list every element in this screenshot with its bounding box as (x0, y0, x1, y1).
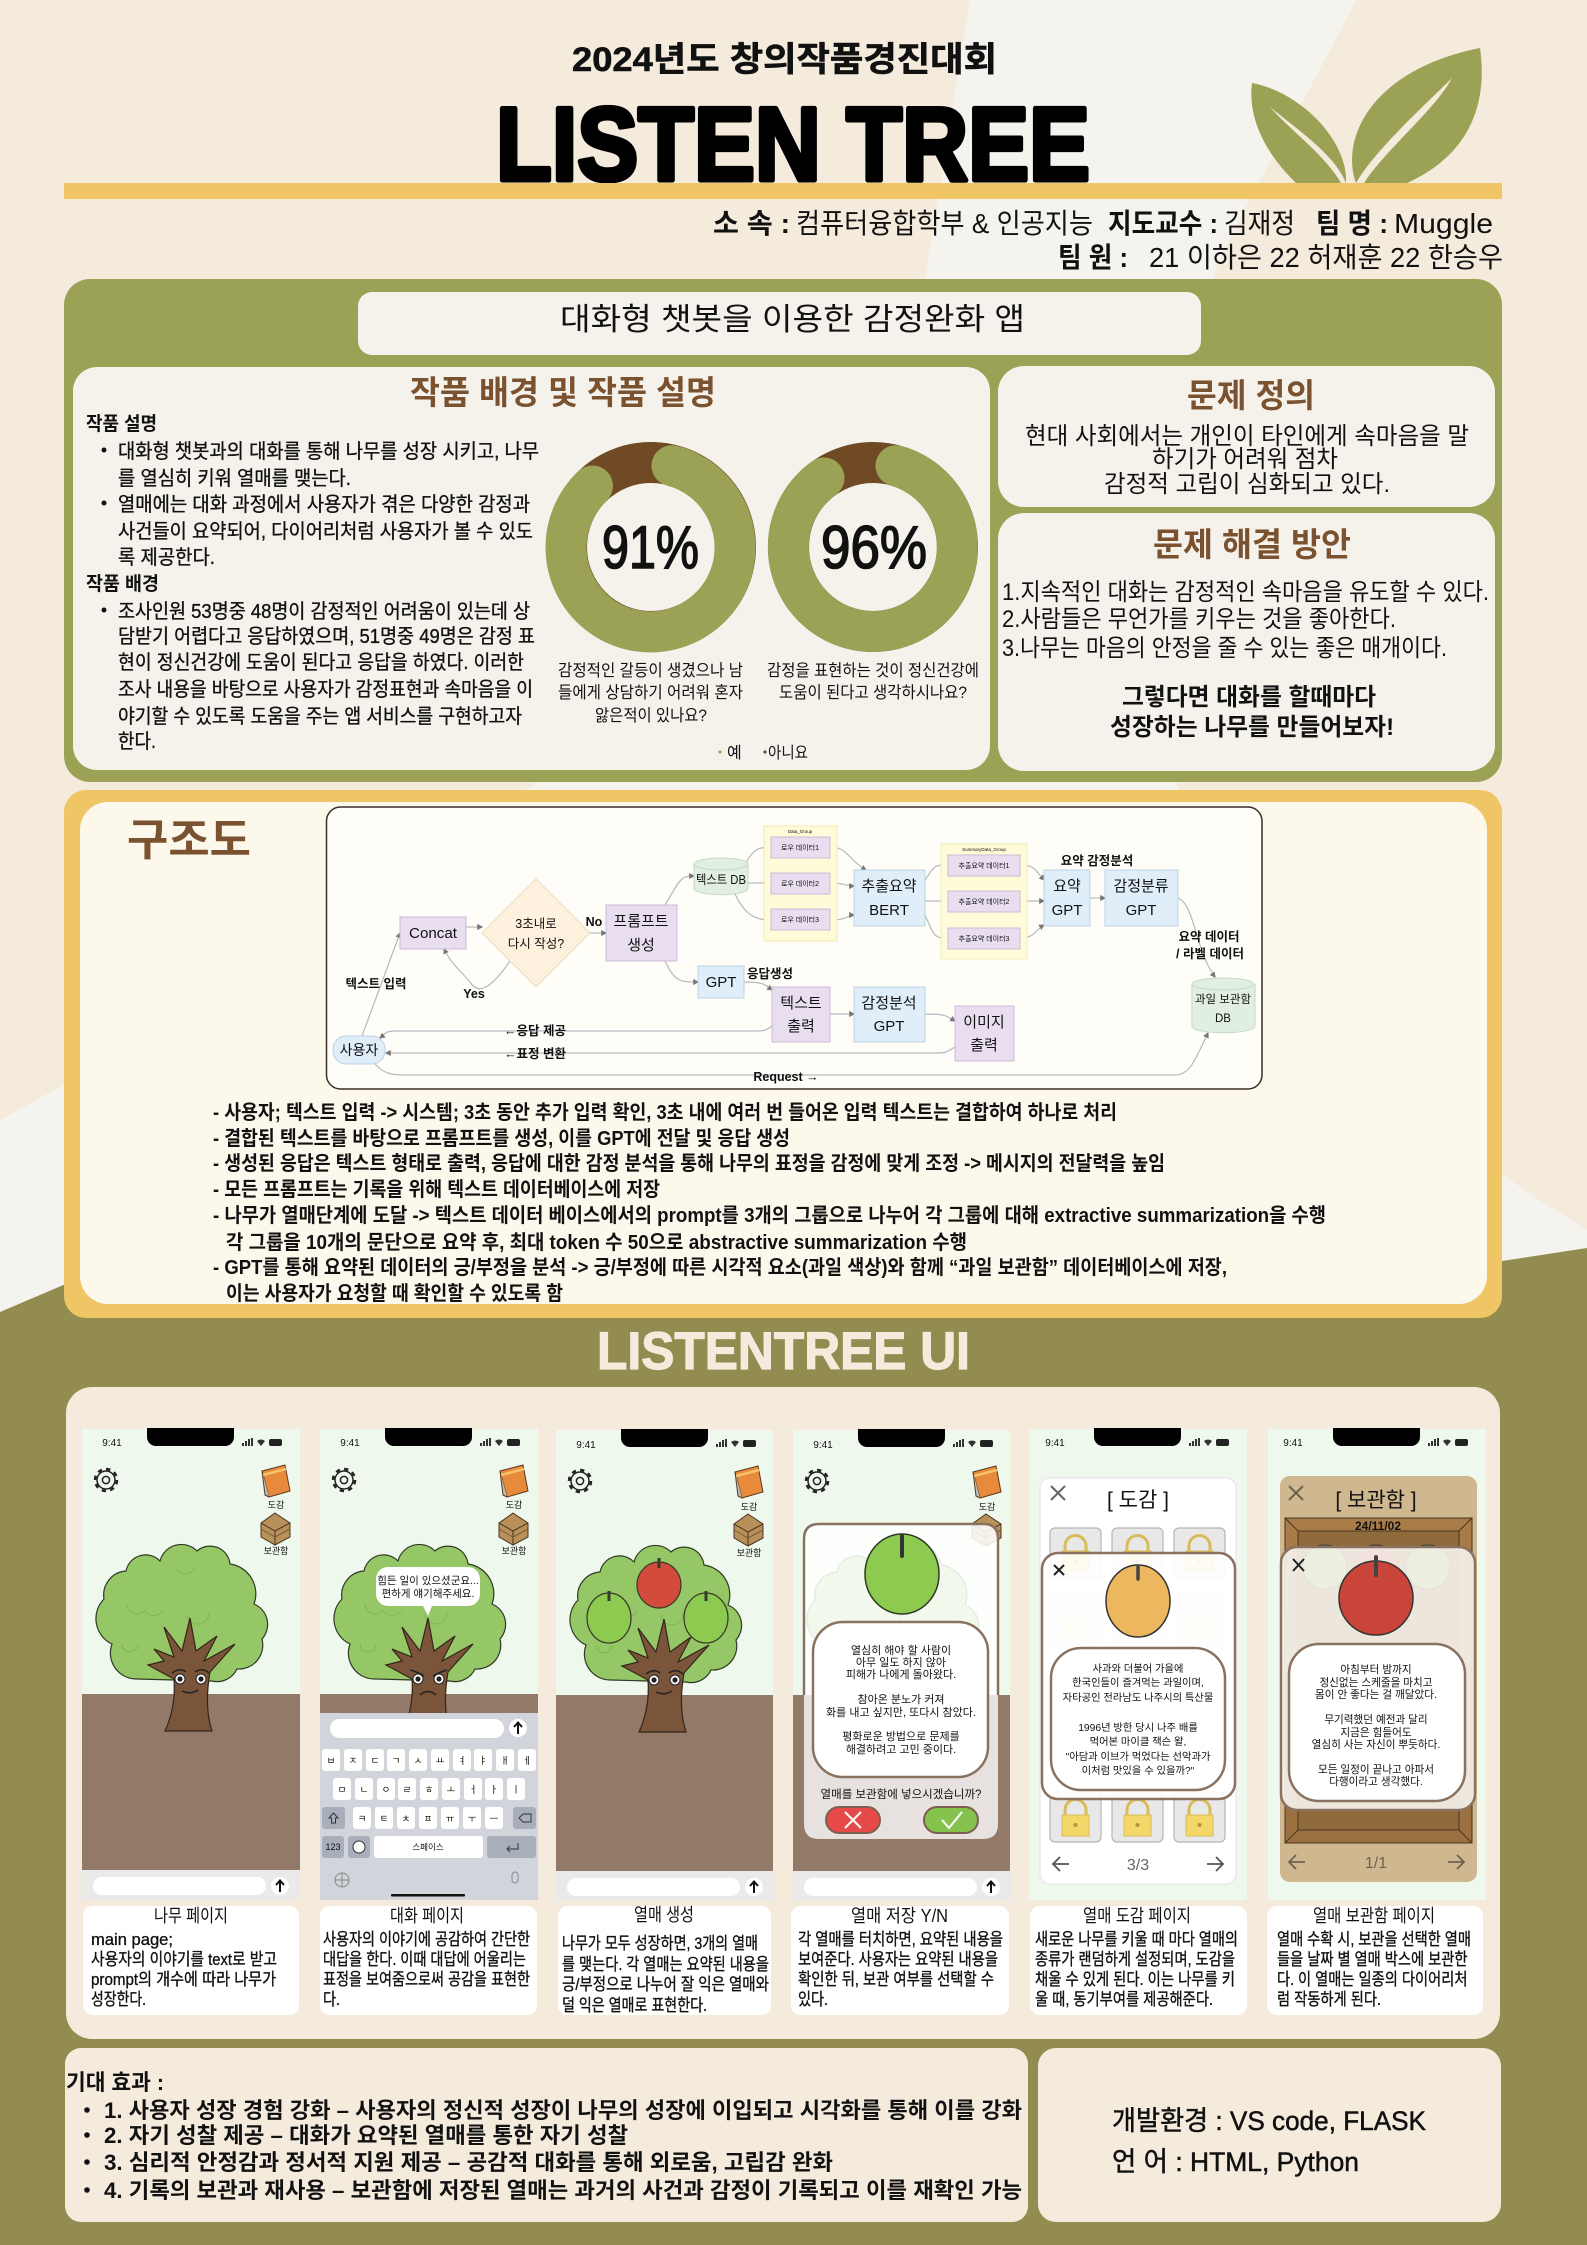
modal: 먹어본 마이클 잭슨 왈, (1090, 1736, 1186, 1748)
keyboard: ㅓ (469, 1785, 477, 1796)
keyboard: ㅣ (512, 1785, 520, 1796)
modal: 다행이라고 생각했다. (1329, 1776, 1423, 1788)
keyboard: ㅇ (382, 1785, 390, 1796)
text: background (86, 573, 535, 753)
panel: ui screens (66, 1387, 1500, 2039)
modal: 몸이 안 좋다는 걸 깨달았다. (1315, 1688, 1437, 1701)
phone: tree page: 보관함 (264, 1546, 288, 1556)
keyboard: ㅕ (458, 1756, 466, 1767)
text: architecture notes: 각 그룹을 10개의 문단으로 요약 후, 최대 token 수 50으로 abstractive summarization 수행 (226, 1231, 967, 1254)
chart legend: 예 (727, 744, 742, 762)
stored fruits (1303, 1545, 1450, 1589)
modal: 사과와 더불어 가을에 (1093, 1663, 1183, 1675)
caption: chat page: 표정을 보여줌으로써 공감을 표현한 (323, 1970, 530, 1989)
panel: expected effects: 1. 사용자 성장 경험 강화 – 사용자의 정신적 성장이 나무의 성장에 이입되고 시각화를 통해 이를 강화 (104, 2098, 1022, 2123)
keyboard: ㅈ (349, 1756, 357, 1767)
caption: collection: 울 때, 동기부여를 제공해준다. (1035, 1990, 1213, 2009)
team info: 21 이하은 22 허재훈 22 한승우 (1149, 242, 1503, 273)
phone: fruit storage: 1/1 (1365, 1855, 1387, 1872)
chart legend: 아니요 (768, 744, 808, 762)
team info: 소 속 : (713, 208, 790, 239)
text: architecture notes: - 모든 프롬프트는 기록을 위해 텍스트 데이터베이스에 저장 (213, 1178, 660, 1201)
panel: project overview (64, 279, 1502, 782)
flow nodes: Data_Group (788, 829, 813, 834)
keyboard: ㅂ (327, 1756, 335, 1767)
text: architecture notes: - GPT를 통해 요약된 데이터의 긍/부정을 분석 -> 긍/부정에 따른 시각적 요소(과일 색상)와 함께 “과일 보관함” 데이터베이스에 저장, (213, 1256, 1227, 1279)
phone: fruit collection (1029, 1428, 1247, 1900)
flow nodes: 추출요약 데이터3 (959, 934, 1010, 943)
phone: fruit collection: 9:41 (1045, 1438, 1065, 1449)
keyboard: ㅡ (490, 1814, 499, 1825)
caption: storage (1267, 1906, 1483, 2015)
contest title: 2024년도 창의작품경진대회 (572, 41, 997, 79)
caption: chat page: 다. (323, 1990, 340, 2009)
text: description: 작품 설명 (86, 413, 157, 435)
text: architecture notes: 이는 사용자가 요청할 때 확인할 수 있도록 함 (226, 1282, 563, 1305)
flow nodes: 사용자 (340, 1042, 378, 1058)
panel: expected effects: 3. 심리적 안정감과 정서적 지원 제공 – 공감적 대화를 통해 외로움, 고립감 완화 (104, 2150, 833, 2175)
caption: fruit creation: 나무가 모두 성장하면, 3개의 열매 (562, 1934, 758, 1953)
modal: 참아온 분노가 커져 (857, 1693, 945, 1706)
modal: 모든 일정이 끝나고 아파서 (1318, 1763, 1434, 1776)
phone: fruit storage: 24/11/02 (1355, 1519, 1401, 1533)
panel: solution: 3.나무는 마음의 안정을 줄 수 있는 좋은 매개이다. (1002, 635, 1447, 662)
flow labels: / 라벨 데이터 (1176, 947, 1244, 961)
team info: Muggle (1394, 208, 1493, 239)
keyboard: ㄷ (371, 1756, 379, 1767)
flow labels: 응답생성 (747, 967, 793, 981)
caption: storage: 열매 보관함 페이지 (1313, 1906, 1435, 1926)
panel: problem definition (998, 366, 1495, 507)
flow nodes: GPT (1126, 902, 1156, 919)
panel: architecture (64, 790, 1502, 1318)
keyboard: ㄹ (403, 1785, 411, 1796)
text: description: 사건들이 요약되어, 다이어리처럼 사용자가 볼 수 있도 (118, 520, 533, 543)
flow nodes: 로우 데이터3 (781, 915, 819, 924)
phone: chat page: 9:41 (340, 1438, 360, 1449)
phone: fruit storage (1268, 1428, 1486, 1900)
panel: development environment: 언 어 : HTML, Python (1112, 2147, 1359, 2177)
caption: fruit creation: 긍/부정으로 나누어 잘 익은 열매와 (562, 1975, 769, 1994)
heading: background and description: 작품 배경 및 작품 설명 (410, 374, 716, 411)
phone: fruit creation (556, 1429, 774, 1901)
flow nodes: 3초내로 (515, 917, 557, 931)
text: architecture notes: - 사용자; 텍스트 입력 -> 시스템; 3초 동안 추가 입력 확인, 3초 내에 여러 번 들어온 입력 텍스트는 결합하여 하나로 처리 (213, 1101, 1117, 1124)
caption: save confirm (791, 1906, 1009, 2015)
flow nodes: GPT (874, 1018, 904, 1035)
chart: donut 91%: 91% (602, 514, 699, 581)
chart captions: 감정을 표현하는 것이 정신건강에 (767, 661, 979, 680)
flow labels: No (586, 915, 603, 929)
caption: collection: 채울 수 있게 된다. 이는 나무를 키 (1035, 1970, 1235, 1989)
icon: leaves (1251, 48, 1482, 183)
keyboard: ㄴ (360, 1785, 368, 1796)
chart captions: 감정적인 갈등이 생겼으나 남 (558, 661, 743, 680)
flow nodes: 텍스트 (780, 995, 822, 1012)
panel: solution: 문제 해결 방안 (1153, 526, 1351, 563)
caption: storage: 럼 작동하게 된다. (1277, 1990, 1381, 2009)
caption: fruit creation: 덜 익은 열매로 표현한다. (562, 1996, 707, 2015)
flow nodes: 감정분류 (1113, 878, 1169, 895)
caption: chat page: 대화 페이지 (390, 1906, 464, 1926)
text: background: 한다. (118, 730, 156, 753)
modal: 무기력했던 예전과 달리 (1324, 1713, 1428, 1726)
flow nodes: 다시 작성? (508, 937, 564, 951)
crate (1285, 1518, 1472, 1843)
modal: 아무 일도 하지 않아 (856, 1655, 946, 1669)
keyboard: ㅔ (523, 1756, 531, 1767)
caption: chat page: 사용자의 이야기에 공감하여 간단한 (323, 1930, 530, 1949)
panel: solution: 1.지속적인 대화는 감정적인 속마음을 유도할 수 있다. (1002, 579, 1489, 606)
flow nodes: 이미지 (963, 1014, 1005, 1031)
caption: tree page: main page; (91, 1930, 173, 1949)
caption: collection: 새로운 나무를 키울 때 마다 열매의 (1035, 1930, 1238, 1949)
chart legend (718, 744, 808, 762)
flow nodes: 요약 (1053, 878, 1081, 895)
flow labels: 텍스트 입력 (346, 977, 406, 991)
text: architecture notes (213, 1101, 1326, 1305)
modal: 해결하려고 고민 중이다. (846, 1742, 956, 1756)
flow nodes: 출력 (787, 1018, 815, 1035)
phone: fruit creation: 9:41 (576, 1440, 596, 1451)
flow labels: 요약 감정분석 (1061, 854, 1133, 868)
title bar (64, 183, 1502, 199)
phone: tree page: 도감 (268, 1499, 284, 1510)
caption: collection: 종류가 랜덤하게 설정되며, 도감을 (1035, 1950, 1235, 1969)
text: background: 야기할 수 있도록 도움을 주는 앱 서비스를 구현하고자 (118, 705, 522, 728)
flow nodes: BERT (869, 902, 909, 919)
keyboard (320, 1713, 538, 1900)
modal: "아담과 이브가 먹었다는 선악과가 (1066, 1751, 1211, 1763)
caption: chat page (320, 1906, 537, 2015)
flow diagram (326, 807, 1262, 1089)
panel: background and description (73, 367, 990, 770)
text: background: 작품 배경 (86, 573, 159, 595)
text: description: 록 제공한다. (118, 546, 215, 569)
heading: architecture: 구조도 (127, 816, 251, 865)
phone: tree page: 9:41 (102, 1438, 122, 1449)
keyboard: ㅜ (468, 1814, 477, 1825)
keyboard: 123 (325, 1842, 341, 1852)
subtitle pill: 대화형 챗봇을 이용한 감정완화 앱 (560, 302, 1025, 337)
caption: save confirm: 각 열매를 터치하면, 요약된 내용을 (798, 1930, 1003, 1949)
text: description: 대화형 챗봇과의 대화를 통해 나무를 성장 시키고, 나무 (118, 440, 539, 463)
caption: save confirm: 있다. (798, 1990, 828, 2009)
flow nodes: SummaryData_Group (962, 847, 1006, 852)
flow nodes: 출력 (970, 1037, 998, 1054)
flow nodes: 과일 보관함 (1195, 992, 1251, 1006)
caption: tree page: 사용자의 이야기를 text로 받고 (91, 1950, 277, 1969)
caption: fruit creation (558, 1905, 771, 2015)
modal: 열심히 해야 할 사람이 (851, 1643, 951, 1657)
keyboard: ㅐ (501, 1756, 509, 1767)
panel: problem definition: 현대 사회에서는 개인이 타인에게 속마음을 말 (1025, 423, 1469, 450)
phone: fruit storage: 9:41 (1283, 1438, 1303, 1449)
flow labels: Request → (753, 1070, 819, 1084)
team info: 팀 명 : (1316, 208, 1388, 239)
caption: tree page: prompt의 개수에 따라 나무가 (91, 1970, 276, 1989)
phone: fruit storage: [ 보관함 ] (1335, 1489, 1417, 1512)
keyboard: ㅑ (479, 1756, 487, 1767)
keyboard: ㅌ (380, 1814, 388, 1825)
caption: collection: 열매 도감 페이지 (1083, 1906, 1191, 1926)
chart: donut 91% (566, 462, 736, 632)
modal: 아침부터 밤까지 (1340, 1664, 1412, 1676)
text: background: 조사인원 53명중 48명이 감정적인 어려움이 있는데 상 (118, 600, 530, 623)
connectors (362, 847, 1215, 1075)
phone: fruit save confirm: 9:41 (813, 1440, 833, 1451)
caption: tree page (83, 1906, 299, 2015)
flow nodes: 추출요약 데이터1 (959, 861, 1010, 870)
text: architecture notes: - 나무가 열매단계에 도달 -> 텍스트 데이터 베이스에서의 prompt를 3개의 그룹으로 나누어 각 그룹에 대해 extractive summarization을 수행 (213, 1204, 1326, 1227)
chart captions: 들에게 상담하기 어려워 혼자 (558, 683, 743, 702)
team info: 김재정 (1224, 208, 1295, 239)
phone: chat page: 보관함 (502, 1546, 526, 1556)
flow labels: ←표정 변환 (504, 1047, 566, 1061)
phone: fruit collection: 3/3 (1127, 1857, 1149, 1874)
panel: solution: 2.사람들은 무언가를 키우는 것을 좋아한다. (1002, 606, 1396, 633)
team info: 컴퓨터융합학부 & 인공지능 (796, 208, 1093, 239)
keyboard: ㅍ (424, 1814, 432, 1825)
modal (1042, 1553, 1235, 1799)
caption: collection (1030, 1906, 1247, 2015)
caption: storage: 다. 이 열매는 일종의 다이어리처 (1277, 1970, 1468, 1989)
phone: fruit creation: 보관함 (737, 1548, 761, 1558)
speech bubble (376, 1567, 480, 1616)
team info: 지도교수 : (1108, 208, 1218, 239)
main title: LISTEN TREE (496, 87, 1090, 203)
flow nodes: 로우 데이터2 (781, 879, 819, 888)
chart captions (558, 661, 979, 725)
panel: expected effects: 기대 효과 : (66, 2070, 164, 2095)
modal: 정신없는 스케줄을 마치고 (1319, 1676, 1433, 1689)
keyboard: ㅎ (425, 1785, 433, 1796)
panel: solution (998, 513, 1495, 771)
flow nodes: 추출요약 데이터2 (959, 897, 1010, 906)
modal (804, 1524, 998, 1839)
panel: solution: 성장하는 나무를 만들어보자! (1110, 714, 1394, 741)
text: description (86, 413, 539, 569)
caption cards (83, 1905, 1483, 2015)
caption: fruit creation: 열매 생성 (634, 1905, 694, 1925)
speech bubble: 힘든 일이 있으셨군요... (377, 1574, 479, 1587)
keyboard: ㅊ (402, 1814, 410, 1825)
caption: storage: 들을 날짜 별 열매 박스에 보관한 (1277, 1950, 1468, 1969)
flow nodes: Concat (409, 925, 458, 942)
phone: chat page: 도감 (506, 1499, 522, 1510)
flow nodes: 텍스트 DB (696, 873, 746, 887)
flow labels: Yes (463, 987, 485, 1001)
flow nodes: 로우 데이터1 (781, 843, 819, 852)
heading: ui section: LISTENTREE UI (597, 1322, 970, 1381)
keyboard: ㅛ (436, 1756, 445, 1767)
panel: expected effects: 4. 기록의 보관과 재사용 – 보관함에 저장된 열매는 과거의 사건과 감정이 기록되고 이를 재확인 가능 (104, 2178, 1022, 2203)
flow nodes (333, 826, 1255, 1064)
text: background: 현이 정신건강에 도움이 된다고 응답을 하였다. 이러한 (118, 651, 524, 674)
modal: 피해가 나에게 돌아왔다. (846, 1667, 956, 1681)
phone: tree page (82, 1428, 300, 1900)
flow nodes: 감정분석 (861, 995, 917, 1012)
flow nodes: GPT (706, 974, 736, 991)
flow labels (346, 854, 1244, 1084)
panel: expected effects: 2. 자기 성찰 제공 – 대화가 요약된 열매를 통한 자기 성찰 (104, 2123, 628, 2148)
keyboard: ㅏ (490, 1785, 498, 1796)
modal: 자타공인 전라남도 나주시의 특산물 (1063, 1692, 1213, 1704)
flow nodes: DB (1215, 1013, 1231, 1025)
keyboard: ㅁ (338, 1785, 346, 1796)
caption: tree page: 나무 페이지 (154, 1906, 228, 1926)
speech bubble: 편하게 얘기해주세요. (382, 1587, 474, 1600)
subtitle pill (358, 292, 1201, 355)
flow labels: ←응답 제공 (504, 1023, 566, 1038)
text: description: 열매에는 대화 과정에서 사용자가 겪은 다양한 감정과 (118, 493, 530, 516)
modal: 평화로운 방법으로 문제를 (842, 1730, 960, 1743)
team info (713, 208, 1503, 273)
keyboard: ㄱ (392, 1756, 400, 1767)
caption: save confirm: 열매 저장 Y/N (851, 1906, 948, 1926)
modal: 지금은 힘들어도 (1340, 1727, 1412, 1739)
keyboard: 스페이스 (412, 1842, 444, 1852)
text: background: 조사 내용을 바탕으로 사용자가 감정표현과 속마음을 이 (118, 678, 533, 701)
panel: problem definition: 감정적 고립이 심화되고 있다. (1104, 471, 1390, 498)
text: description: 를 열심히 키워 열매를 맺는다. (118, 467, 351, 490)
chart captions: 도움이 된다고 생각하시나요? (779, 683, 967, 702)
modal: 화를 내고 싶지만, 또다시 참았다. (826, 1706, 976, 1719)
panel: solution: 그렇다면 대화를 할때마다 (1122, 684, 1376, 711)
modal: 이처럼 맛있을 수 있을까?" (1082, 1764, 1195, 1777)
flow nodes: 생성 (627, 937, 655, 954)
modal: 1996년 방한 당시 나주 배를 (1078, 1722, 1198, 1734)
caption: fruit creation: 를 맺는다. 각 열매는 요약된 내용을 (562, 1955, 769, 1974)
caption: chat page: 대답을 한다. 이때 대답에 어울리는 (323, 1950, 526, 1969)
caption: save confirm: 확인한 뒤, 보관 여부를 선택할 수 (798, 1970, 994, 1989)
modal: 한국인들이 즐겨먹는 과일이며, (1072, 1677, 1204, 1689)
modal: 열매를 보관함에 넣으시겠습니까? (821, 1788, 981, 1801)
keyboard: ㅠ (446, 1814, 455, 1825)
keyboard: ㅗ (447, 1785, 456, 1796)
keyboard: ㅋ (358, 1814, 366, 1825)
phone: fruit collection: [ 도감 ] (1107, 1489, 1169, 1512)
flow nodes: GPT (1052, 902, 1082, 919)
text: architecture notes: - 결합된 텍스트를 바탕으로 프롬프트를 생성, 이를 GPT에 전달 및 응답 생성 (213, 1127, 790, 1150)
chart: donut 96% (788, 462, 958, 632)
text: background: 담받기 어렵다고 응답하였으며, 51명중 49명은 감정 표 (118, 625, 535, 648)
modal: 열심히 사는 자신이 뿌듯하다. (1312, 1738, 1440, 1751)
caption: tree page: 성장한다. (91, 1990, 146, 2009)
flow nodes: 프롬프트 (613, 913, 669, 930)
flow nodes: 추출요약 (861, 878, 917, 895)
keyboard: ㅅ (414, 1756, 422, 1767)
panel: expected effects (65, 2048, 1028, 2222)
panel: problem definition: 하기가 어려워 점차 (1152, 446, 1338, 473)
phone: fruit save confirm (793, 1429, 1011, 1901)
chart captions: 앓은적이 있나요? (595, 706, 707, 725)
fruits (587, 1558, 728, 1643)
caption: storage: 열매 수확 시, 보관을 선택한 열매 (1277, 1930, 1471, 1949)
flow labels: 요약 데이터 (1179, 930, 1239, 944)
panel: problem definition: 문제 정의 (1187, 377, 1315, 414)
panel: development environment: 개발환경 : VS code, FLASK (1112, 2106, 1426, 2136)
caption: save confirm: 보여준다. 사용자는 요약된 내용을 (798, 1950, 998, 1969)
chart: donut 96%: 96% (821, 514, 927, 581)
text: architecture notes: - 생성된 응답은 텍스트 형태로 출력, 응답에 대한 감정 분석을 통해 나무의 표정을 감정에 맞게 조정 -> 메시지의 전달력을 높임 (213, 1152, 1165, 1175)
phone: fruit save confirm: 도감 (979, 1501, 995, 1512)
phone: fruit creation: 도감 (741, 1501, 757, 1512)
team info: 팀 원 : (1058, 242, 1128, 273)
phone: chat page (320, 1428, 538, 1900)
panel: development environment (1038, 2048, 1501, 2222)
modal (1281, 1547, 1475, 1810)
